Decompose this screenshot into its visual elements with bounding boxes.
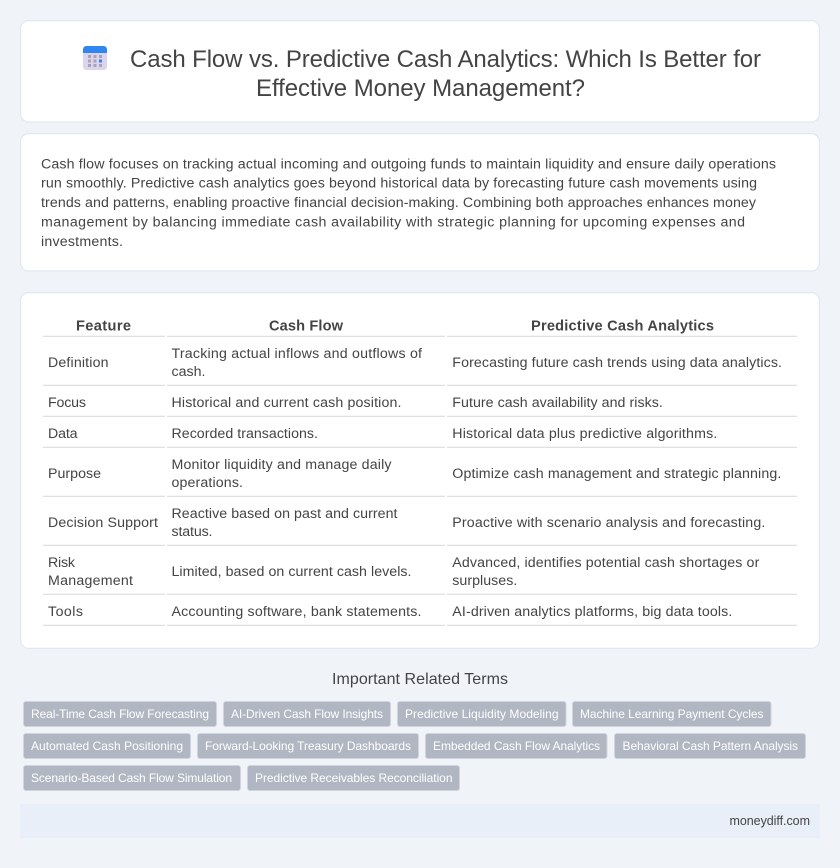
panel: comparison table (21, 293, 819, 648)
row: purpose: operations. (172, 475, 243, 491)
row: data: Data (48, 426, 78, 442)
row: definition: Forecasting future cash trends using data analytics. (452, 355, 782, 371)
related terms chips: Automated Cash Positioning (31, 739, 183, 753)
row: purpose: Optimize cash management and strategic planning. (452, 466, 781, 482)
related terms chips: Machine Learning Payment Cycles (580, 707, 764, 721)
row: data: Historical data plus predictive algorithms. (452, 426, 717, 442)
panel: summary paragraph: Cash flow focuses on tracking actual incoming and outgoing funds to maintain liquidity and ensure daily operations (41, 156, 776, 172)
title: Cash Flow vs. Predictive Cash Analytics: Which Is Better for (130, 46, 761, 73)
related terms chips: Behavioral Cash Pattern Analysis (622, 739, 798, 753)
panel: header (21, 21, 819, 122)
table header: Predictive Cash Analytics (531, 318, 714, 334)
row: definition (48, 346, 782, 380)
footer: moneydiff.com (730, 814, 810, 828)
row: decision support: Proactive with scenario analysis and forecasting. (452, 515, 765, 531)
related terms chips: Predictive Receivables Reconciliation (255, 771, 452, 785)
panel: summary paragraph: management by balancing immediate cash availability with strategic planning for upcoming expenses and (41, 214, 745, 230)
title: Effective Money Management? (256, 75, 585, 102)
row: focus: Historical and current cash position. (172, 395, 402, 411)
related terms chips: AI-Driven Cash Flow Insights (231, 707, 383, 721)
row: focus (48, 395, 663, 411)
row: data: Recorded transactions. (172, 426, 318, 442)
table header: Cash Flow (269, 318, 344, 334)
heading: related terms: Important Related Terms (332, 671, 508, 688)
row: risk management: surpluses. (452, 573, 517, 589)
table header (76, 318, 714, 334)
row: risk management: Limited, based on current cash levels. (172, 564, 412, 580)
related terms chips: Predictive Liquidity Modeling (405, 707, 558, 721)
row: risk management (48, 555, 760, 589)
panel: summary paragraph: trends and patterns, enabling proactive financial decision-making. Combining both approaches enhances money (41, 195, 757, 211)
row: risk management: Risk (48, 555, 76, 571)
row: risk management: Management (48, 573, 133, 589)
row: purpose (48, 457, 781, 491)
title (130, 46, 761, 102)
row: tools (48, 604, 732, 620)
row: purpose: Purpose (48, 466, 101, 482)
row: data (48, 426, 717, 442)
row: tools: Accounting software, bank statements. (172, 604, 422, 620)
row: tools: AI-driven analytics platforms, big data tools. (452, 604, 732, 620)
related terms chips (24, 702, 806, 790)
panel: summary paragraph (21, 134, 819, 271)
row: decision support: Reactive based on past and current (172, 506, 398, 522)
row: decision support (48, 506, 765, 540)
row: definition: Tracking actual inflows and outflows of (172, 346, 422, 362)
table header: Feature (76, 318, 131, 334)
row: definition: cash. (172, 364, 206, 380)
row: risk management: Advanced, identifies potential cash shortages or (452, 555, 760, 571)
related terms chips: Scenario-Based Cash Flow Simulation (31, 771, 232, 785)
footer (20, 804, 820, 838)
icon: calendar (83, 46, 107, 70)
related terms chips: Real-Time Cash Flow Forecasting (31, 707, 209, 721)
row: definition: Definition (48, 355, 108, 371)
row: tools: Tools (48, 604, 83, 620)
related terms chips: Embedded Cash Flow Analytics (433, 739, 600, 753)
row: purpose: Monitor liquidity and manage daily (172, 457, 392, 473)
row: decision support: Decision Support (48, 515, 158, 531)
related terms chips: Forward-Looking Treasury Dashboards (205, 739, 411, 753)
panel: summary paragraph: run smoothly. Predictive cash analytics goes beyond historical data by forecasting future cash movements using (41, 176, 757, 192)
row: focus: Focus (48, 395, 86, 411)
panel: summary paragraph: investments. (41, 234, 123, 250)
row: decision support: status. (172, 524, 212, 540)
row: focus: Future cash availability and risks. (452, 395, 663, 411)
